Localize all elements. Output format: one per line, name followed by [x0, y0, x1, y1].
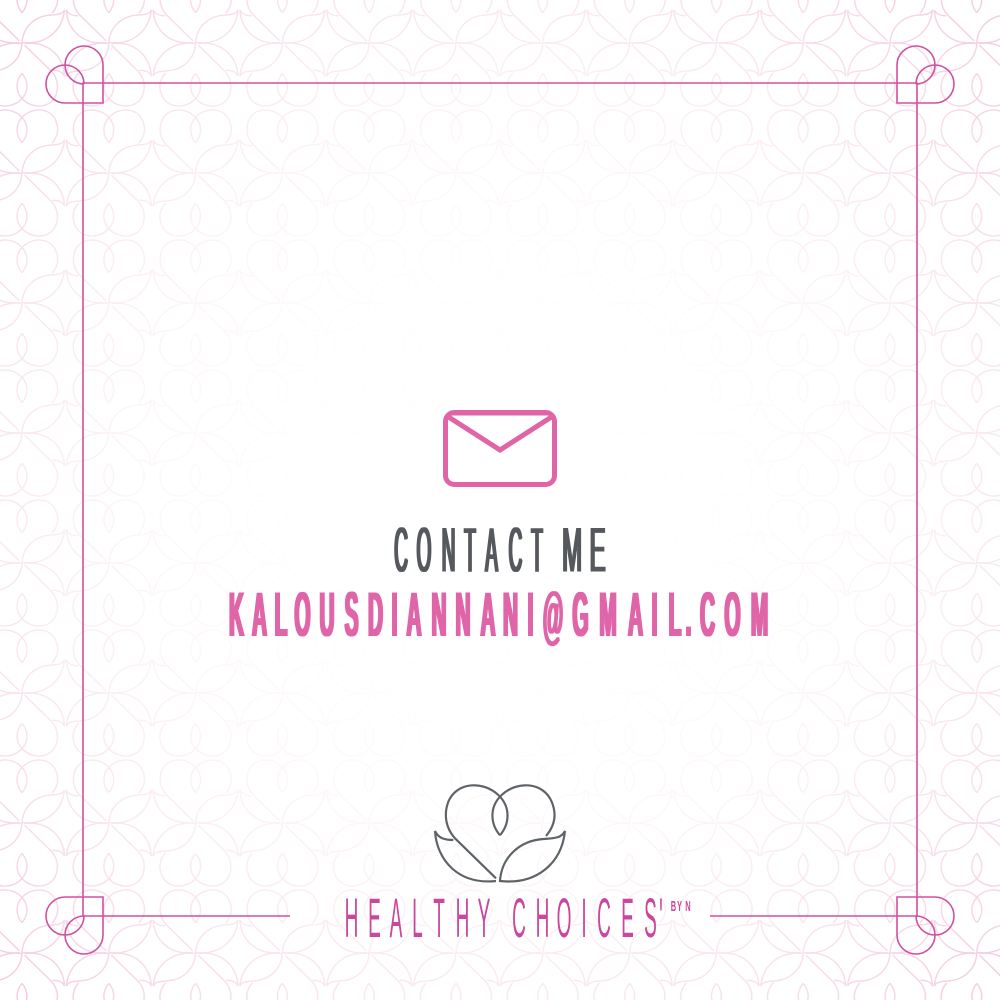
icon: top-right corner heart [897, 46, 954, 103]
icon: top-left corner heart [46, 46, 103, 103]
icon: bottom-left corner heart [46, 897, 103, 954]
heading: contact me: ME [562, 516, 606, 586]
brand wordmark: HEALTHY CHOICES' [345, 886, 663, 949]
heading: contact me [394, 515, 606, 586]
icon: envelope [446, 412, 554, 484]
logo: heart and leaves [435, 785, 565, 881]
brand suffix: BYN [671, 897, 691, 915]
icon: bottom-right corner heart [897, 897, 954, 954]
email address: KALOUSDIANNANI@GMAIL.COM [229, 580, 768, 649]
frame lines [83, 83, 917, 916]
heading: contact me: CONTACT [394, 515, 543, 585]
brand name [345, 886, 691, 949]
